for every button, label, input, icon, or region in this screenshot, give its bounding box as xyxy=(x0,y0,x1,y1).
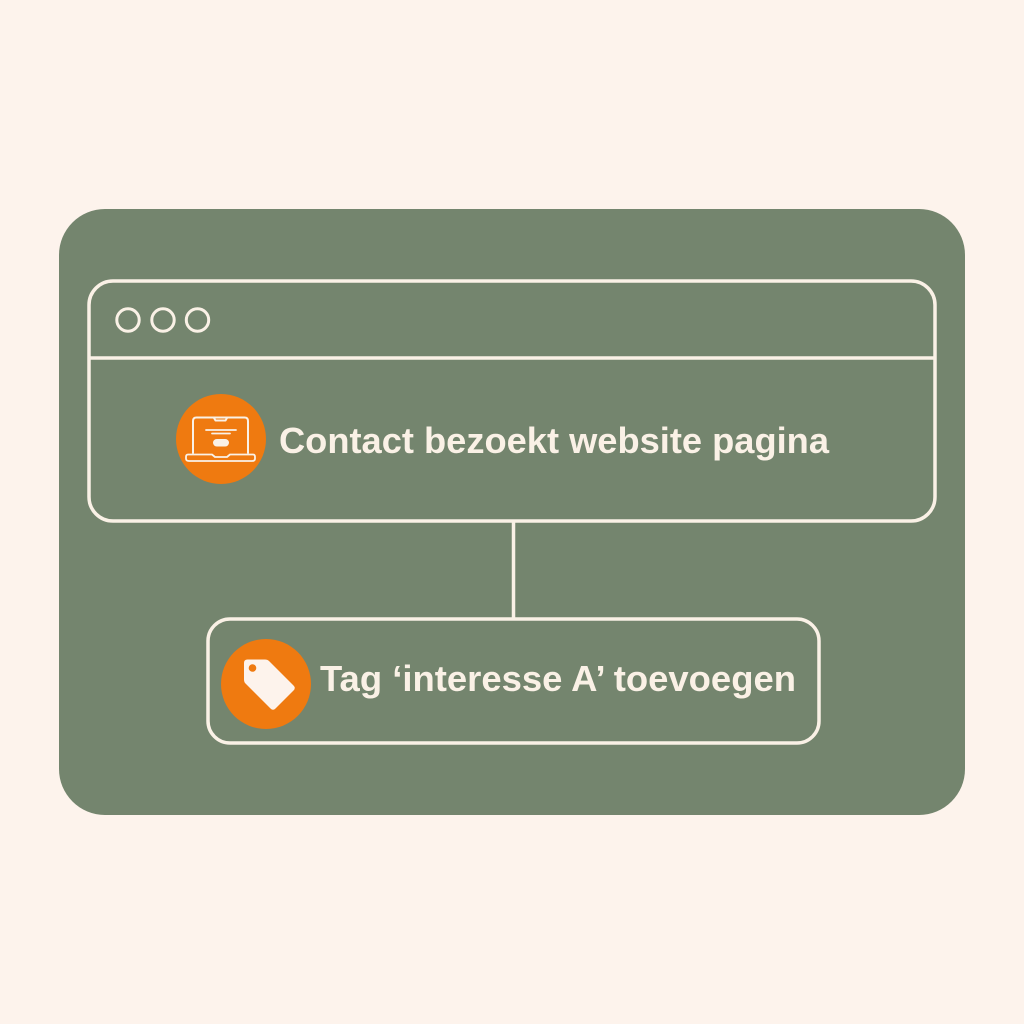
panel: green background card xyxy=(59,209,965,815)
text: add tag: Tag ‘interesse A’ toevoegen xyxy=(320,658,796,699)
icon: laptop on orange circle xyxy=(176,394,266,484)
panel: tag action box xyxy=(208,619,819,743)
browser window buttons xyxy=(117,309,209,331)
icon: tag on orange circle xyxy=(221,639,311,729)
connector line between browser and tag box xyxy=(512,520,515,619)
panel: browser window xyxy=(89,281,935,521)
text: website visit: Contact bezoekt website pagina xyxy=(279,420,830,461)
